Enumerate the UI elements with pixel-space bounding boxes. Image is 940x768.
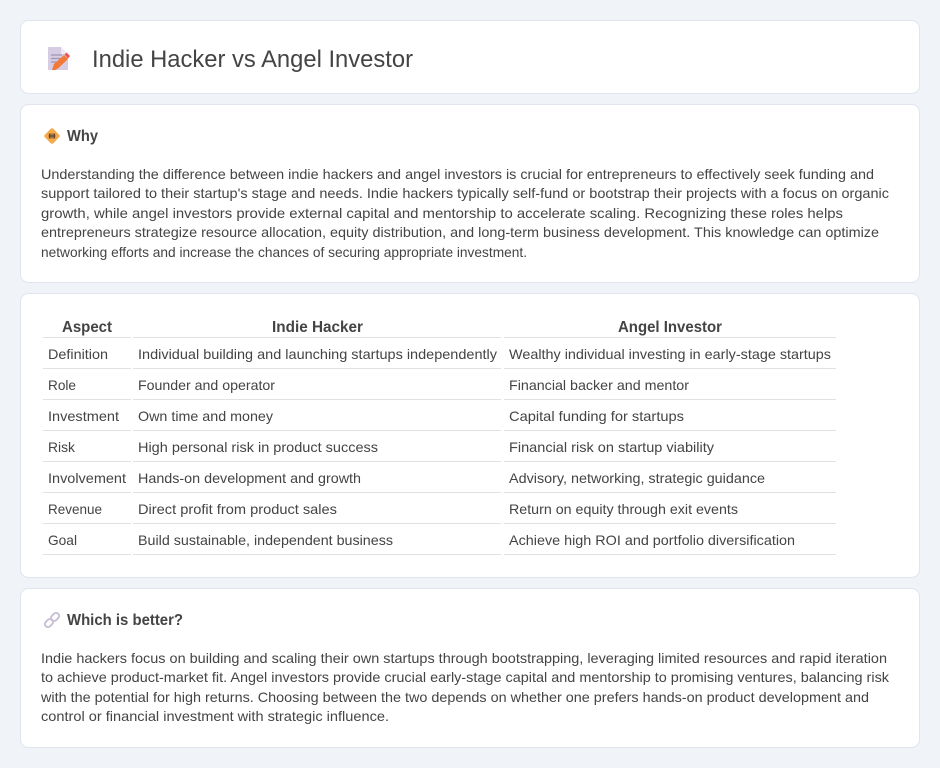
text block: why: Understanding the difference between indie hackers and angel investors is crucial for entrepreneurs to effectively seek funding and [41,166,874,182]
icon: document with pencil [48,47,70,70]
row: risk [48,439,714,455]
row: definition: Definition [48,346,108,362]
row: involvement: Involvement [48,470,126,486]
table header [62,319,722,336]
row: involvement [48,470,765,486]
text block: why: support tailored to their startup's stage and needs. Indie hackers typically self-fund or bootstrap their projects with a focus on organic [41,185,889,201]
panel: title [20,20,920,94]
row: revenue: Return on equity through exit events [509,501,738,517]
text block: why [41,166,889,260]
row: revenue: Direct profit from product sales [138,501,337,517]
icon: orange diamond sign [44,128,60,144]
text block: why: growth, while angel investors provide external capital and mentorship to accelerate scaling. Recognizing these roles helps [41,205,843,221]
text block: which is better: to achieve product-market fit. Angel investors provide crucial early-stage capital and mentorship to promising ventures, balancing risk [41,669,890,685]
heading: title: Indie Hacker vs Angel Investor [92,46,413,73]
row: role: Role [48,377,76,393]
row: risk: Financial risk on startup viability [509,439,714,455]
text block: which is better: Indie hackers focus on building and scaling their own startups through bootstrapping, leveraging limited resources and rapid iteration [41,650,887,666]
panel: why [20,104,920,282]
row: goal [48,532,795,548]
table header: Angel Investor [618,319,722,336]
panel: which is better [20,588,920,748]
row: investment: Capital funding for startups [509,408,684,424]
text block: which is better: with the potential for high returns. Choosing between the two depends on whether one prefers hands-on product development and [40,689,869,705]
row: risk: High personal risk in product success [138,439,378,455]
text block: why: entrepreneurs strategize resource allocation, equity distribution, and long-term business development. This knowledge can optimize [41,224,879,240]
row: goal: Build sustainable, independent business [138,532,393,548]
row: goal: Goal [48,532,77,548]
row: role [48,377,689,393]
text block: which is better: control or financial investment with strategic influence. [41,708,389,724]
row: role: Founder and operator [138,377,275,393]
row: definition: Wealthy individual investing in early-stage startups [509,346,831,362]
panel: comparison table [20,294,920,578]
row: risk: Risk [48,439,76,455]
row: definition: Individual building and launching startups independently [138,346,497,362]
table header: Aspect [62,319,113,336]
row: goal: Achieve high ROI and portfolio diversification [509,532,795,548]
text block: which is better [40,650,890,724]
row: investment: Own time and money [138,408,273,424]
row: revenue: Revenue [48,501,102,517]
table header: Indie Hacker [272,319,363,336]
text block: why: networking efforts and increase the chances of securing appropriate investment. [41,244,527,260]
row: investment [48,408,684,424]
icon: link [44,612,60,628]
row: revenue [48,501,738,517]
heading: which is better: Which is better? [67,612,183,629]
row: involvement: Hands-on development and growth [138,470,361,486]
row: definition [48,346,831,362]
row: investment: Investment [48,408,119,424]
heading: why: Why [67,128,98,145]
row: involvement: Advisory, networking, strategic guidance [509,470,765,486]
row: role: Financial backer and mentor [509,377,689,393]
